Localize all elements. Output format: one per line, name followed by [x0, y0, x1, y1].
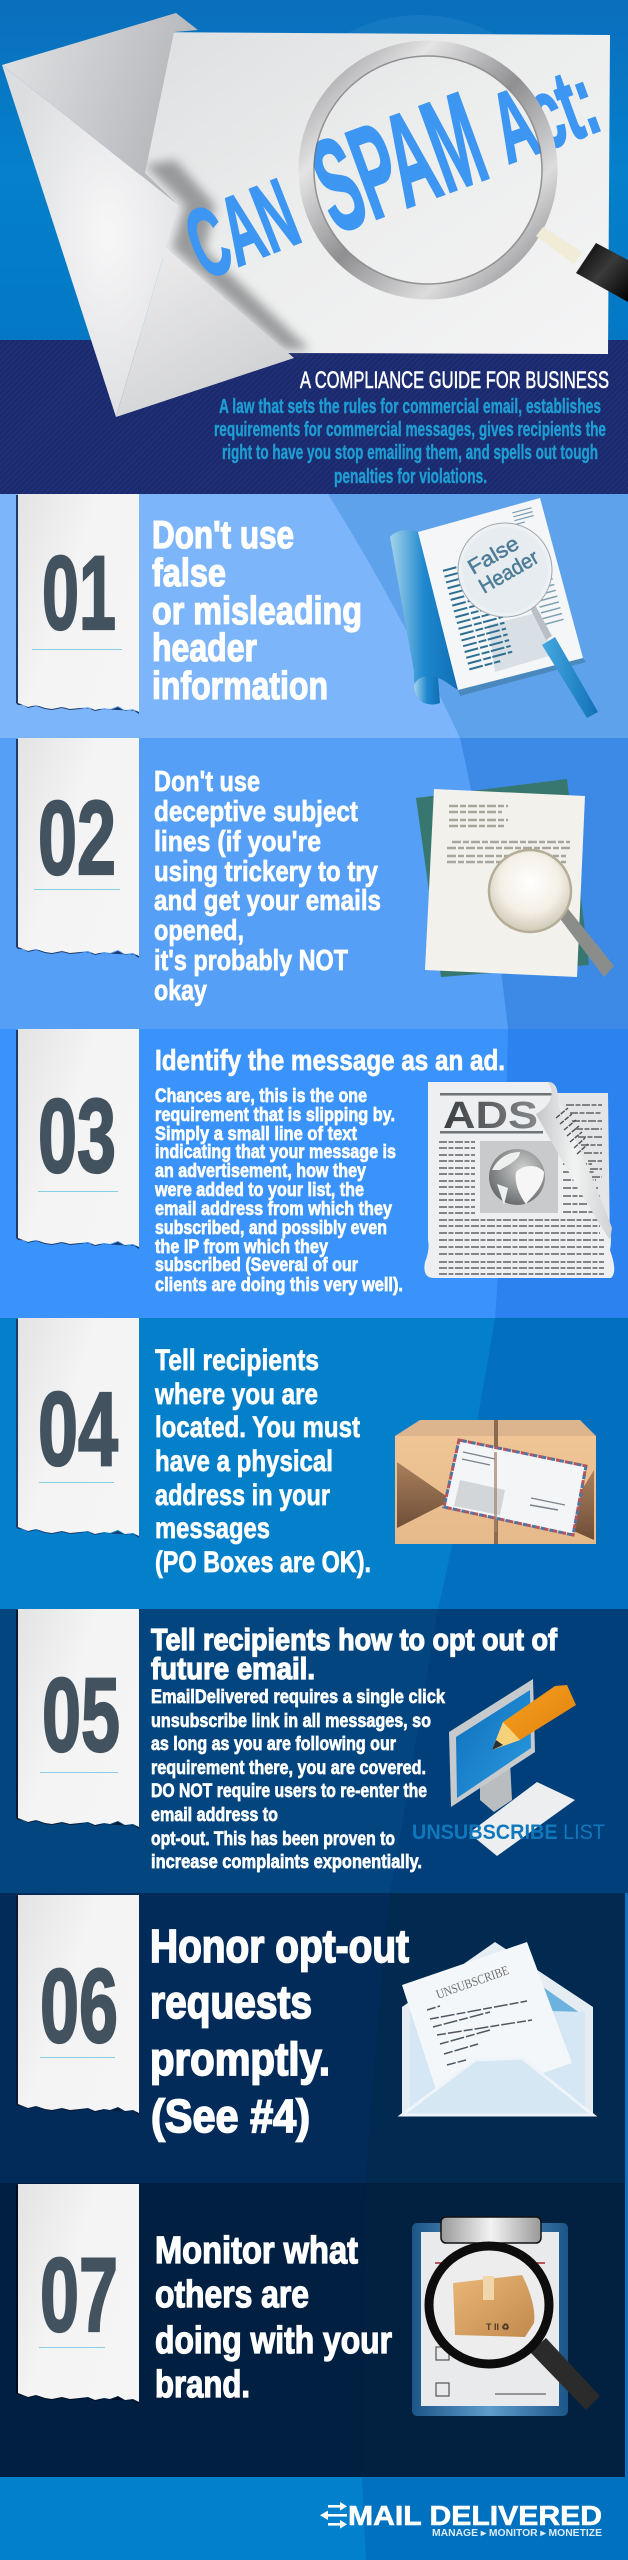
heading 01: Don't use	[152, 514, 294, 557]
body text 03: indicating that your message is	[155, 1141, 396, 1163]
heading 06	[150, 1920, 409, 2142]
heading 01: false	[152, 552, 226, 595]
body text 05: EmailDelivered requires a single click	[151, 1687, 445, 1708]
heading 04: Tell recipients	[155, 1344, 319, 1377]
slip 03	[16, 1029, 139, 1249]
heading 04: messages	[155, 1512, 270, 1545]
number 05: 05	[42, 1657, 120, 1774]
number 01: 01	[42, 535, 116, 652]
icon: clipboard and magnifier: T II ♻	[486, 2322, 510, 2332]
icon: newspaper with ads: ADS	[443, 1095, 538, 1137]
heading 07: brand.	[155, 2364, 250, 2406]
heading 04: have a physical	[155, 1445, 333, 1478]
body text 03: an advertisement, how they	[155, 1160, 366, 1182]
heading 02: it's probably NOT	[154, 945, 348, 977]
panel: rule 02	[0, 738, 628, 1029]
heading 02: and get your emails	[154, 885, 381, 917]
panel: rule 01	[0, 494, 628, 738]
heading 06: (See #4)	[151, 2090, 310, 2142]
intro text: penalties for violations.	[334, 465, 487, 488]
panel: rule 05	[0, 1609, 628, 1893]
heading 01: or misleading	[152, 590, 362, 633]
slip 05	[16, 1609, 139, 1829]
number 03: 03	[38, 1078, 116, 1195]
logo arrows	[320, 2502, 347, 2529]
heading 02: okay	[154, 975, 207, 1007]
panel: rule 06	[0, 1893, 628, 2183]
body text 03: subscribed, and possibly even	[155, 1217, 387, 1239]
body text 03: the IP from which they	[155, 1236, 328, 1258]
body text 03: requirement that is slipping by.	[155, 1104, 395, 1126]
body text 03: clients are doing this very well).	[155, 1274, 403, 1296]
heading 06: requests	[150, 1976, 312, 2028]
logo tagline: MANAGE ▸ MONITOR ▸ MONETIZE	[432, 2528, 602, 2539]
heading 01	[152, 514, 362, 708]
envelope left flap	[2, 65, 178, 417]
body text 05: unsubscribe link in all messages, so	[151, 1711, 431, 1732]
icon: unsubscribe letter in envelope: UNSUBSCRIBE	[434, 1962, 511, 2002]
slip 04	[16, 1318, 139, 1538]
number 06: 06	[40, 1948, 118, 2065]
slip 07	[16, 2184, 139, 2404]
body text 05: DO NOT require users to re-enter the	[151, 1781, 427, 1802]
intro text	[214, 395, 606, 488]
heading 01: header	[152, 627, 257, 670]
footer	[0, 2477, 628, 2560]
heading 07: Monitor what	[155, 2230, 358, 2272]
title: CAN SPAM Act	[171, 44, 612, 300]
body text 05: email address to	[151, 1805, 278, 1826]
icon: false header document: Header	[475, 546, 543, 598]
heading 02: using trickery to try	[154, 856, 378, 888]
icon: large magnifying glass	[306, 48, 628, 302]
heading 01: information	[152, 665, 328, 708]
heading 02	[154, 766, 381, 1007]
envelope letter sheet	[140, 32, 610, 354]
heading 02: Don't use	[154, 766, 260, 798]
illustration: envelope	[2, 13, 610, 417]
body text 05: requirement there, you are covered.	[151, 1758, 426, 1779]
body text 05: as long as you are following our	[151, 1734, 397, 1755]
heading 06: promptly.	[150, 2033, 330, 2085]
slip 01	[16, 494, 139, 714]
heading 03: Identify the message as an ad.	[155, 1045, 505, 1077]
icon: false header document	[390, 498, 598, 718]
heading 04: (PO Boxes are OK).	[155, 1546, 371, 1579]
body text 03: Simply a small line of text	[155, 1123, 357, 1145]
panel: rule 07	[0, 2183, 628, 2477]
header navy band	[0, 340, 628, 494]
panel: rule 03	[0, 1029, 628, 1318]
logo wordmark: MAIL DELIVERED	[348, 2500, 602, 2531]
magnifier handle	[576, 243, 628, 302]
heading 05: future email.	[151, 1651, 315, 1686]
envelope front flap	[402, 2058, 593, 2115]
heading 02: deceptive subject	[154, 796, 358, 828]
magnifier neck	[536, 227, 582, 264]
panel: rule 04	[0, 1318, 628, 1609]
body text 03: email address from which they	[155, 1198, 392, 1220]
body text 05: opt-out. This has been proven to	[151, 1829, 395, 1850]
number 04: 04	[38, 1371, 118, 1488]
slip 06	[16, 1895, 139, 2115]
title: CAN SPAM Act: CAN	[171, 158, 312, 300]
heading 07: others are	[155, 2274, 309, 2316]
heading 02: lines (if you're	[154, 826, 321, 858]
icon: unsubscribe letter in envelope	[402, 1942, 593, 2115]
body text 05	[151, 1687, 445, 1873]
body text 03: Chances are, this is the one	[155, 1085, 367, 1107]
envelope top flap	[2, 13, 198, 205]
label: unsubscribe list: UNSUBSCRIBE LIST	[412, 1821, 605, 1844]
heading 07	[155, 2230, 392, 2406]
envelope fold shadow	[145, 160, 310, 350]
icon: newspaper with ads	[424, 1082, 614, 1278]
body text 03	[154, 1085, 403, 1296]
heading 04: where you are	[154, 1378, 318, 1411]
magnifier ring	[306, 48, 550, 292]
heading 04: located. You must	[155, 1411, 360, 1444]
heading 06: Honor opt-out	[150, 1920, 409, 1972]
body text 05: increase complaints exponentially.	[151, 1852, 422, 1873]
number 02: 02	[38, 780, 116, 897]
icon: computer with pencil	[412, 1679, 605, 1856]
heading 05: Tell recipients how to opt out of	[151, 1622, 558, 1657]
logo: Email Delivered	[320, 2500, 602, 2539]
icon: parcel with envelope	[395, 1420, 596, 1544]
body text 03: were added to your list, the	[154, 1179, 364, 1201]
number 07: 07	[40, 2237, 118, 2354]
heading 02: opened,	[154, 915, 244, 947]
heading 05	[151, 1622, 558, 1686]
envelope bottom flap	[116, 248, 294, 417]
icon: document and magnifier	[416, 779, 614, 977]
heading 07: doing with your	[155, 2320, 392, 2362]
heading 04: address in your	[155, 1479, 330, 1512]
header background	[0, 0, 628, 342]
slip 02	[16, 738, 139, 958]
body text 03: subscribed (Several of our	[155, 1254, 358, 1276]
icon: clipboard and magnifier	[412, 2217, 600, 2416]
icon: false header document: False	[464, 532, 523, 579]
heading 04	[154, 1344, 371, 1579]
